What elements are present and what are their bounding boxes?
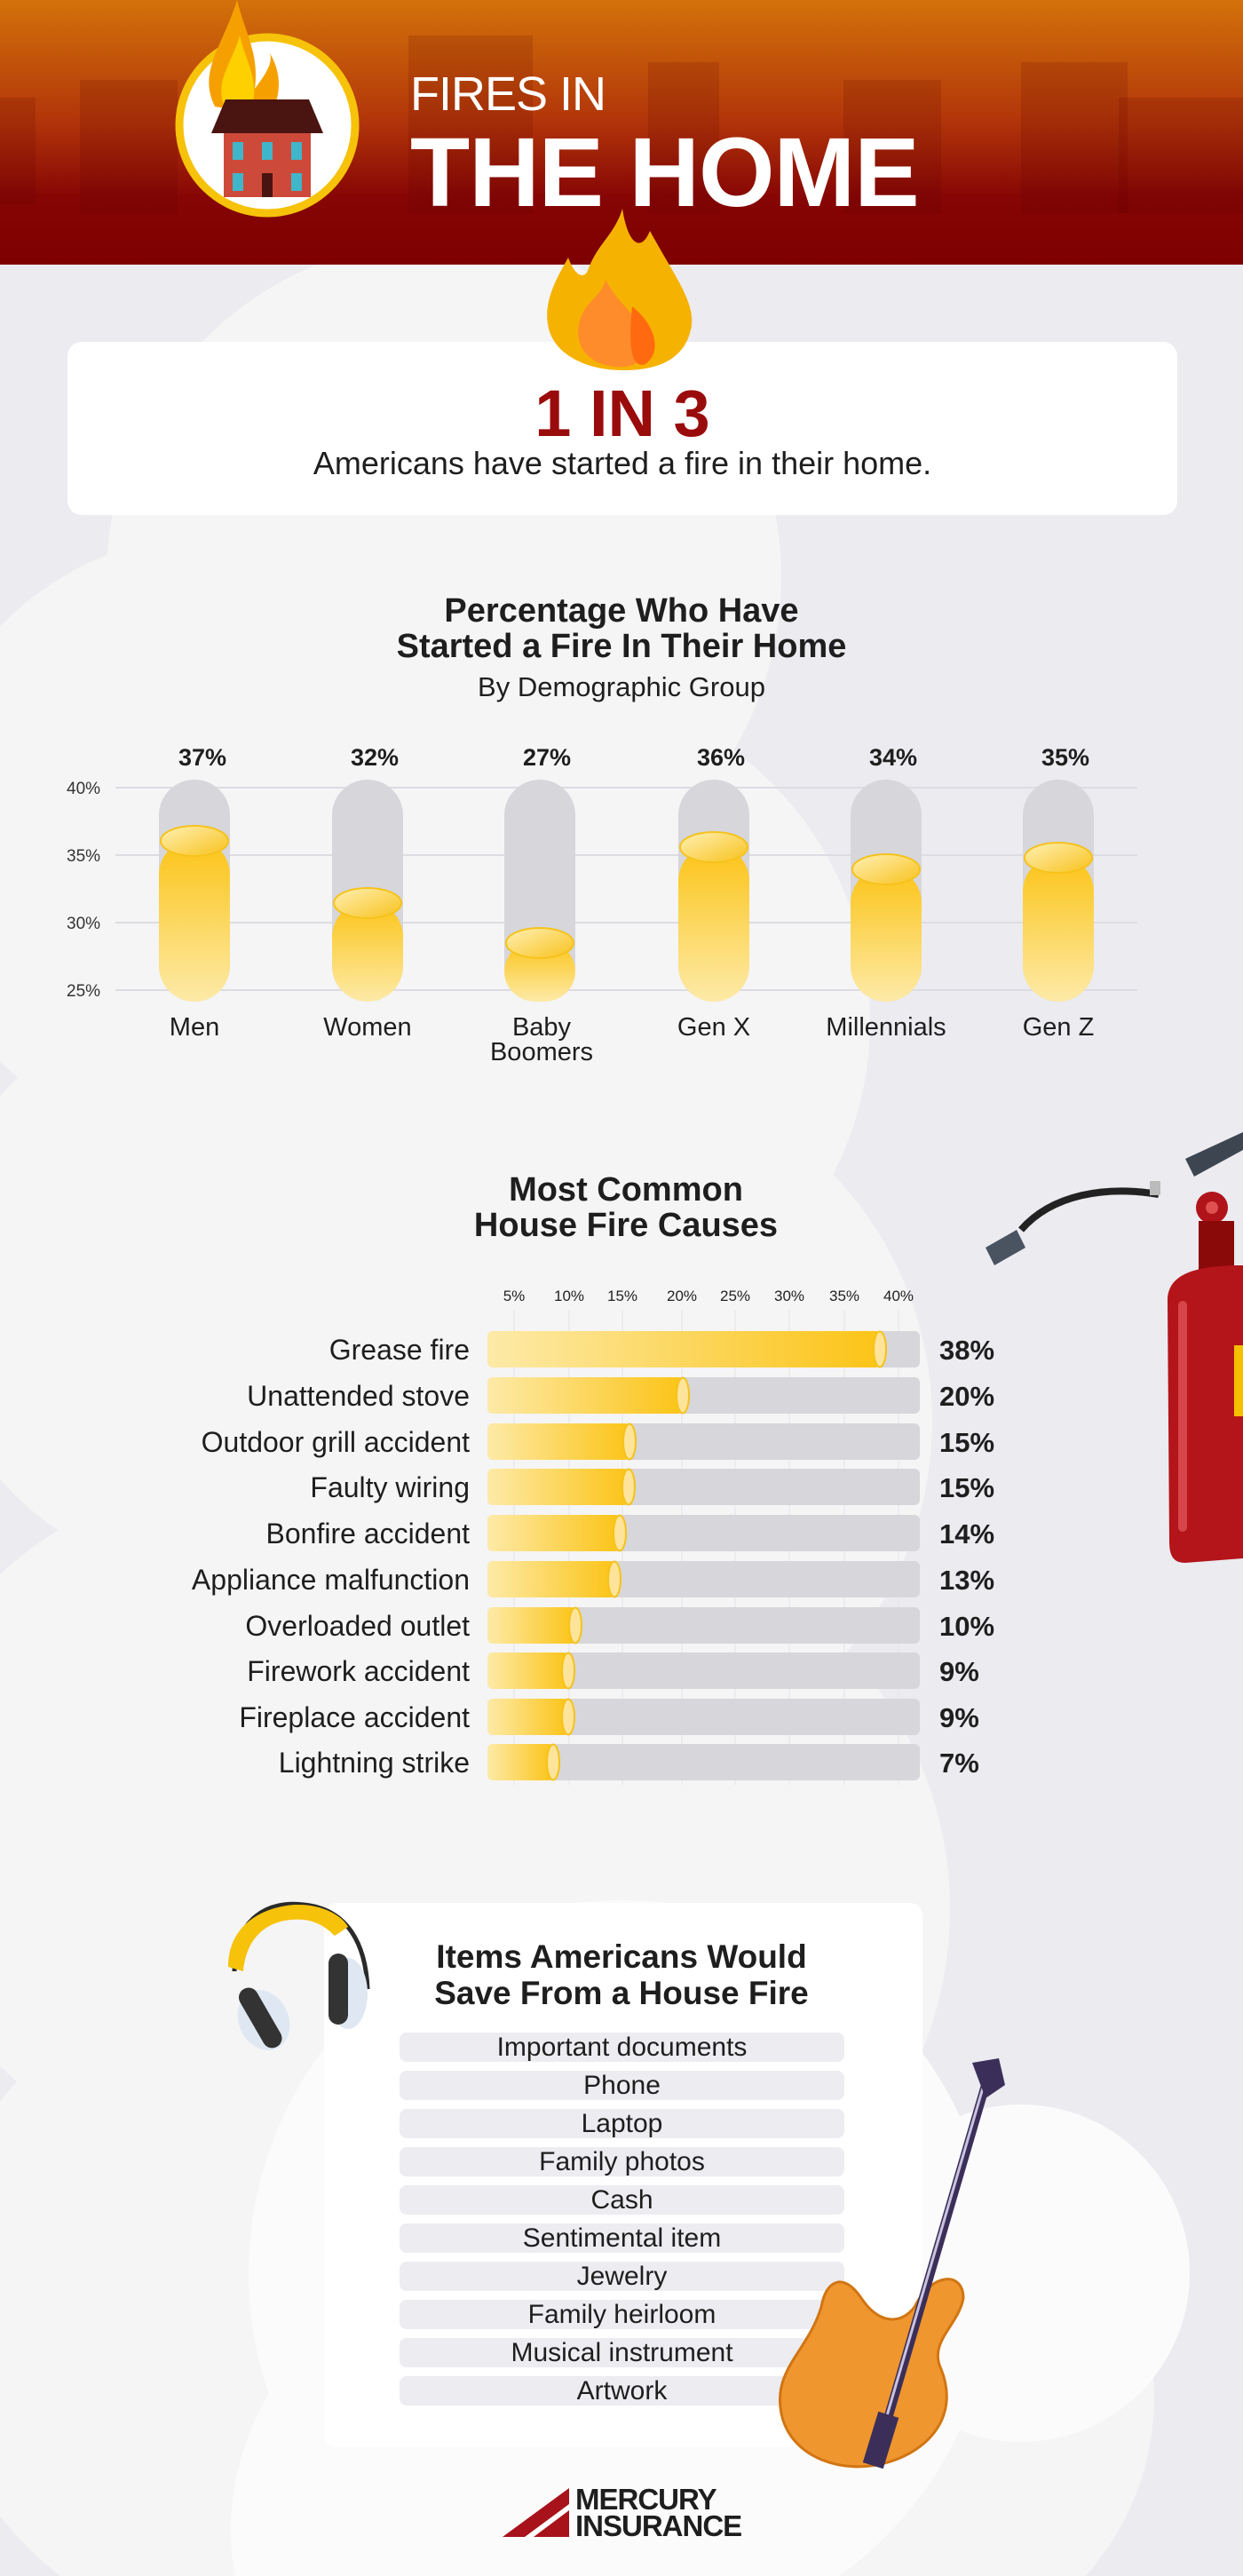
panel title: Items Americans Would xyxy=(436,1938,807,1975)
stat card: 1 in 3: Americans have started a fire in their home. xyxy=(313,445,931,481)
horizontal bar chart: 15% xyxy=(939,1427,994,1458)
vertical bar chart: 32% xyxy=(351,744,399,771)
icon: headphones xyxy=(228,1902,369,2050)
icon: burning house xyxy=(176,0,359,217)
vertical bar chart: 30% xyxy=(67,915,100,933)
chart title: percentage by demographic: By Demographic Group xyxy=(478,671,765,702)
title: FIRES IN xyxy=(410,67,606,121)
stat card: 1 in 3 xyxy=(67,342,1177,515)
panel: items americans would save xyxy=(324,1903,922,2447)
vertical bar chart: Boomers xyxy=(490,1038,593,1066)
horizontal bar chart: 7% xyxy=(939,1748,979,1779)
vertical bar chart: Baby xyxy=(512,1013,572,1042)
chart title: house fire causes: Most Common xyxy=(509,1171,743,1209)
chart title: percentage by demographic: Percentage Who Have xyxy=(444,592,799,630)
horizontal bar chart: 5% xyxy=(503,1288,525,1304)
horizontal bar chart: 20% xyxy=(939,1381,994,1412)
item list: Artwork xyxy=(577,2376,667,2406)
item list: Musical instrument xyxy=(511,2338,733,2367)
item list: Important documents xyxy=(497,2033,747,2062)
icon: flame xyxy=(547,209,693,370)
horizontal bar chart: 20% xyxy=(667,1288,697,1304)
horizontal bar chart: Faulty wiring xyxy=(310,1471,470,1503)
horizontal bar chart: Grease fire xyxy=(329,1334,470,1366)
horizontal bar chart: 9% xyxy=(939,1702,979,1733)
horizontal bar chart: Bonfire accident xyxy=(266,1518,470,1550)
panel title: Save From a House Fire xyxy=(434,1975,809,2011)
item list: Cash xyxy=(590,2185,653,2215)
horizontal bar chart: 30% xyxy=(774,1288,804,1304)
vertical bar chart: Gen Z xyxy=(1023,1013,1094,1042)
horizontal bar chart: 15% xyxy=(939,1472,994,1503)
horizontal bar chart: Appliance malfunction xyxy=(192,1564,470,1596)
horizontal bar chart: Firework accident xyxy=(247,1655,470,1687)
horizontal bar chart: Lightning strike xyxy=(279,1747,470,1779)
logo: mercury insurance: INSURANCE xyxy=(575,2509,741,2542)
horizontal bar chart: Overloaded outlet xyxy=(245,1610,470,1642)
vertical bar chart: 36% xyxy=(697,744,745,771)
horizontal bar chart xyxy=(192,1288,994,1785)
horizontal bar chart: 15% xyxy=(607,1288,637,1304)
chart title: house fire causes: House Fire Causes xyxy=(474,1207,778,1244)
stat card: 1 in 3: 1 IN 3 xyxy=(534,376,710,450)
horizontal bar chart: Unattended stove xyxy=(247,1380,470,1412)
vertical bar chart: 35% xyxy=(1041,744,1089,771)
vertical bar chart: Men xyxy=(170,1013,219,1042)
vertical bar chart: 34% xyxy=(869,744,917,771)
logo: mercury insurance: MERCURY xyxy=(575,2483,717,2516)
vertical bar chart: 40% xyxy=(67,780,100,798)
chart title: percentage by demographic xyxy=(397,592,846,702)
item list: Phone xyxy=(583,2071,661,2100)
chart title: house fire causes xyxy=(474,1171,778,1244)
icon: guitar xyxy=(778,2058,1005,2469)
horizontal bar chart: 25% xyxy=(720,1288,750,1304)
chart title: percentage by demographic: Started a Fire In Their Home xyxy=(397,628,846,665)
panel title xyxy=(434,1938,809,2011)
vertical bar chart: 35% xyxy=(67,847,100,866)
title xyxy=(410,67,919,227)
horizontal bar chart: Outdoor grill accident xyxy=(202,1426,470,1458)
item list: Family heirloom xyxy=(528,2300,716,2329)
horizontal bar chart: 10% xyxy=(554,1288,584,1304)
vertical bar chart: Women xyxy=(323,1013,412,1042)
horizontal bar chart: 14% xyxy=(939,1518,994,1550)
item list: Sentimental item xyxy=(523,2223,721,2253)
title: THE HOME xyxy=(410,118,919,227)
vertical bar chart xyxy=(67,744,1137,1066)
header banner xyxy=(0,0,1243,265)
vertical bar chart: Gen X xyxy=(677,1013,750,1042)
horizontal bar chart: 40% xyxy=(883,1288,914,1304)
horizontal bar chart: Fireplace accident xyxy=(239,1701,470,1733)
horizontal bar chart: 38% xyxy=(939,1335,994,1366)
vertical bar chart: Millennials xyxy=(826,1013,946,1042)
item list: Laptop xyxy=(582,2109,662,2138)
logo: mercury insurance xyxy=(503,2483,741,2542)
horizontal bar chart: 9% xyxy=(939,1656,979,1687)
icon: fire extinguisher xyxy=(986,1132,1243,1563)
horizontal bar chart: 13% xyxy=(939,1565,994,1596)
vertical bar chart: 27% xyxy=(523,744,571,771)
item list: Family photos xyxy=(539,2147,705,2176)
vertical bar chart: 25% xyxy=(67,982,100,1001)
horizontal bar chart: 10% xyxy=(939,1611,994,1642)
horizontal bar chart: 35% xyxy=(829,1288,859,1304)
vertical bar chart: 37% xyxy=(178,744,226,771)
item list: Jewelry xyxy=(577,2262,667,2291)
item list xyxy=(400,2033,844,2406)
